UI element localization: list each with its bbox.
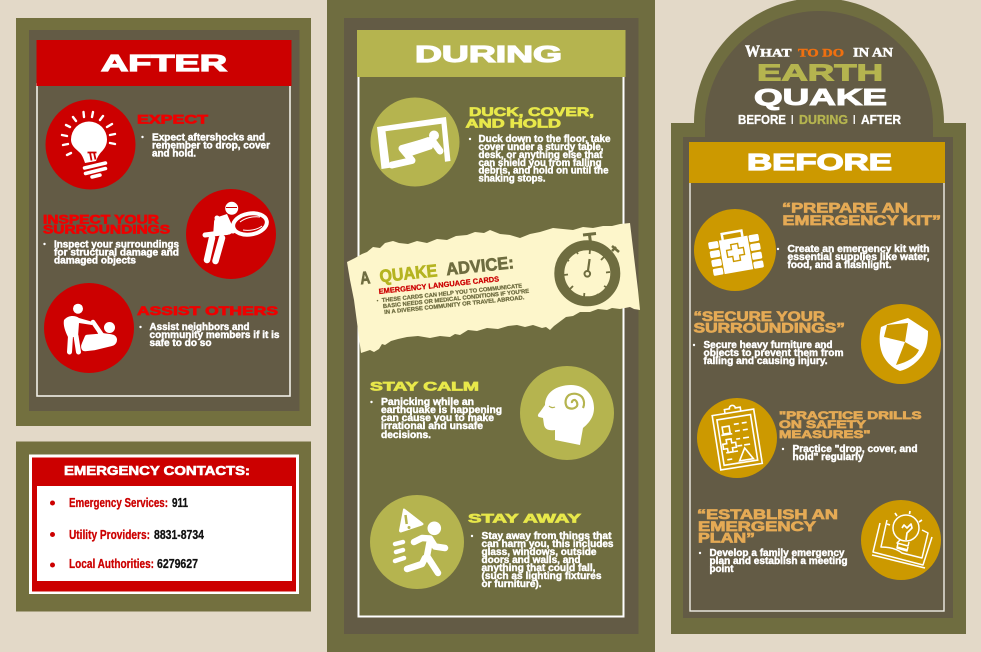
title: I bbox=[791, 113, 794, 127]
heading: during bbox=[357, 30, 626, 77]
section: stay calm: Panicking while an bbox=[381, 397, 474, 408]
icon: clipboard checklist bbox=[697, 398, 777, 478]
section: practice drills: Practice "drop, cover, and bbox=[792, 444, 918, 455]
section: establish an emergency plan: Develop a family emergency bbox=[710, 548, 845, 559]
icon: book with light bulb bbox=[861, 500, 941, 580]
title bbox=[738, 42, 901, 127]
section: prepare an emergency kit: Create an emergency kit with bbox=[788, 244, 930, 255]
section: expect: and hold. bbox=[152, 148, 196, 160]
title: W bbox=[745, 42, 760, 61]
section: prepare an emergency kit: “PREPARE AN bbox=[782, 201, 908, 216]
callout text: BASIC NEEDS OR MEDICAL CONDITIONS IF YOU'RE bbox=[383, 289, 530, 310]
section: inspect your surroundings: SURROUNDINGS bbox=[43, 222, 170, 236]
contact: utility providers: 8831-8734 bbox=[154, 527, 205, 542]
section: inspect your surroundings: Inspect your surroundings bbox=[54, 240, 179, 250]
icon: person under table bbox=[370, 98, 460, 186]
section: inspect your surroundings: INSPECT YOUR bbox=[43, 212, 159, 226]
section: establish an emergency plan bbox=[697, 507, 848, 575]
callout text: A bbox=[359, 267, 371, 288]
section: expect bbox=[137, 112, 270, 160]
section: duck, cover, and hold: can shield you from falling bbox=[478, 158, 602, 169]
icon: head with spiral bbox=[520, 366, 614, 460]
section: stay away: can harm you, this includes bbox=[482, 539, 614, 550]
icon: light bulb bbox=[46, 100, 136, 190]
section: practice drills: hold" regularly bbox=[792, 452, 864, 463]
icon: helping a person bbox=[44, 283, 134, 373]
title: AFTER bbox=[861, 113, 901, 127]
contact: utility providers: Utility Providers: bbox=[69, 527, 150, 542]
section: establish an emergency plan: point bbox=[710, 564, 734, 575]
icon: shield bbox=[861, 304, 941, 384]
section: assist others: community members if it is bbox=[150, 330, 280, 341]
heading: before: BEFORE bbox=[747, 149, 892, 175]
section: stay calm: decisions. bbox=[381, 430, 431, 441]
section: secure your surroundings: objects to prevent them from bbox=[704, 348, 844, 359]
title: HAT bbox=[760, 46, 792, 60]
section: expect: remember to drop, cover bbox=[152, 140, 270, 152]
section: duck, cover, and hold: desk, or anything else that bbox=[478, 150, 603, 161]
heading: after: AFTER bbox=[101, 50, 227, 76]
section: stay away: or furniture). bbox=[482, 579, 542, 590]
section: duck, cover, and hold: AND HOLD bbox=[466, 116, 562, 130]
callout text: ADVICE: bbox=[445, 252, 515, 279]
section: stay calm: can cause you to make bbox=[381, 413, 494, 424]
section: practice drills: "PRACTICE DRILLS bbox=[779, 410, 922, 422]
section: prepare an emergency kit: essential supplies like water, bbox=[788, 252, 930, 263]
heading: emergency contacts: EMERGENCY CONTACTS: bbox=[64, 464, 250, 478]
section: stay away: (such as lighting fixtures bbox=[482, 571, 602, 582]
section: expect: EXPECT bbox=[137, 112, 209, 126]
contact: emergency services: 911 bbox=[172, 495, 188, 510]
callout: a quake advice torn paper bbox=[347, 223, 640, 353]
section: stay calm bbox=[370, 380, 502, 441]
section: duck, cover, and hold bbox=[466, 105, 611, 184]
panel: emergency contacts bbox=[16, 442, 311, 612]
section: duck, cover, and hold: shaking stops. bbox=[478, 174, 546, 184]
title: IN AN bbox=[853, 45, 894, 60]
callout text: THESE CARDS CAN HELP YOU TO COMMUNICATE bbox=[382, 283, 523, 304]
section: prepare an emergency kit bbox=[777, 201, 941, 271]
section: inspect your surroundings: for structural damage and bbox=[54, 248, 179, 258]
title: DURING bbox=[799, 113, 848, 127]
section: assist others: safe to do so bbox=[150, 338, 212, 349]
section: establish an emergency plan: EMERGENCY bbox=[698, 519, 816, 534]
icon: emergency kit bbox=[694, 209, 776, 291]
section: practice drills: MEASURES" bbox=[779, 429, 870, 441]
icon: running from hazard bbox=[370, 495, 464, 589]
section: stay calm: earthquake is happening bbox=[381, 405, 502, 416]
section: inspect your surroundings: damaged objects bbox=[54, 256, 136, 266]
contact: utility providers bbox=[50, 527, 205, 542]
section: assist others: ASSIST OTHERS bbox=[137, 304, 278, 318]
section: stay away: anything that could fall, bbox=[482, 563, 596, 574]
callout text: IN A DIVERSE COMMUNITY OR TRAVEL ABROAD. bbox=[384, 295, 525, 316]
section: duck, cover, and hold: Duck down to the floor, take bbox=[478, 134, 611, 145]
section: expect: Expect aftershocks and bbox=[152, 132, 265, 144]
section: establish an emergency plan: plan and establish a meeting bbox=[710, 556, 848, 567]
section: stay away: glass, windows, outside bbox=[482, 547, 597, 558]
section: secure your surroundings: SURROUNDINGS” bbox=[694, 320, 845, 335]
contact: local authorities: 6279627 bbox=[157, 556, 198, 571]
section: duck, cover, and hold: DUCK, COVER, bbox=[469, 105, 594, 119]
panel: during bbox=[327, 0, 655, 652]
title: I bbox=[853, 113, 856, 127]
section: stay away: doors and walls, and bbox=[482, 555, 580, 566]
section: inspect your surroundings bbox=[43, 212, 179, 266]
panel: after bbox=[16, 18, 311, 426]
panel: before with arch bbox=[671, 0, 966, 634]
contact: emergency services: Emergency Services: bbox=[69, 495, 168, 510]
section: practice drills bbox=[779, 410, 922, 463]
callout text bbox=[359, 251, 530, 318]
section: stay away: Stay away from things that bbox=[482, 531, 612, 542]
section: secure your surroundings: falling and causing injury. bbox=[704, 356, 828, 367]
section: secure your surroundings bbox=[693, 309, 845, 367]
heading: before bbox=[689, 142, 945, 183]
title: QUAKE bbox=[754, 84, 887, 110]
section: establish an emergency plan: “ESTABLISH AN bbox=[697, 507, 838, 522]
callout text: QUAKE bbox=[378, 260, 438, 286]
heading: after bbox=[36, 40, 292, 86]
section: secure your surroundings: “SECURE YOUR bbox=[694, 309, 825, 324]
title: TO DO bbox=[798, 46, 844, 60]
section: duck, cover, and hold: cover under a sturdy table, bbox=[478, 142, 604, 153]
section: establish an emergency plan: PLAN” bbox=[698, 531, 755, 546]
title: EARTH bbox=[757, 60, 883, 86]
section: stay away: STAY AWAY bbox=[468, 511, 581, 525]
section: practice drills: ON SAFETY bbox=[779, 419, 867, 431]
section: secure your surroundings: Secure heavy furniture and bbox=[704, 340, 832, 351]
section: duck, cover, and hold: debris, and hold on until the bbox=[478, 166, 609, 176]
heading: during: DURING bbox=[415, 41, 562, 67]
section: stay calm: STAY CALM bbox=[370, 380, 479, 394]
icon: person with magnifying glass bbox=[186, 189, 276, 279]
section: prepare an emergency kit: food, and a flashlight. bbox=[788, 260, 892, 271]
callout text: EMERGENCY LANGUAGE CARDS bbox=[378, 274, 500, 296]
section: prepare an emergency kit: EMERGENCY KIT” bbox=[782, 213, 941, 228]
section: assist others: Assist neighbors and bbox=[150, 322, 250, 333]
section: stay away bbox=[468, 511, 614, 590]
title: BEFORE bbox=[738, 113, 786, 127]
section: assist others bbox=[137, 304, 280, 349]
icon: stopwatch bbox=[559, 234, 619, 301]
contact: local authorities: Local Authorities: bbox=[69, 556, 154, 571]
section: stay calm: irrational and unsafe bbox=[381, 421, 483, 432]
